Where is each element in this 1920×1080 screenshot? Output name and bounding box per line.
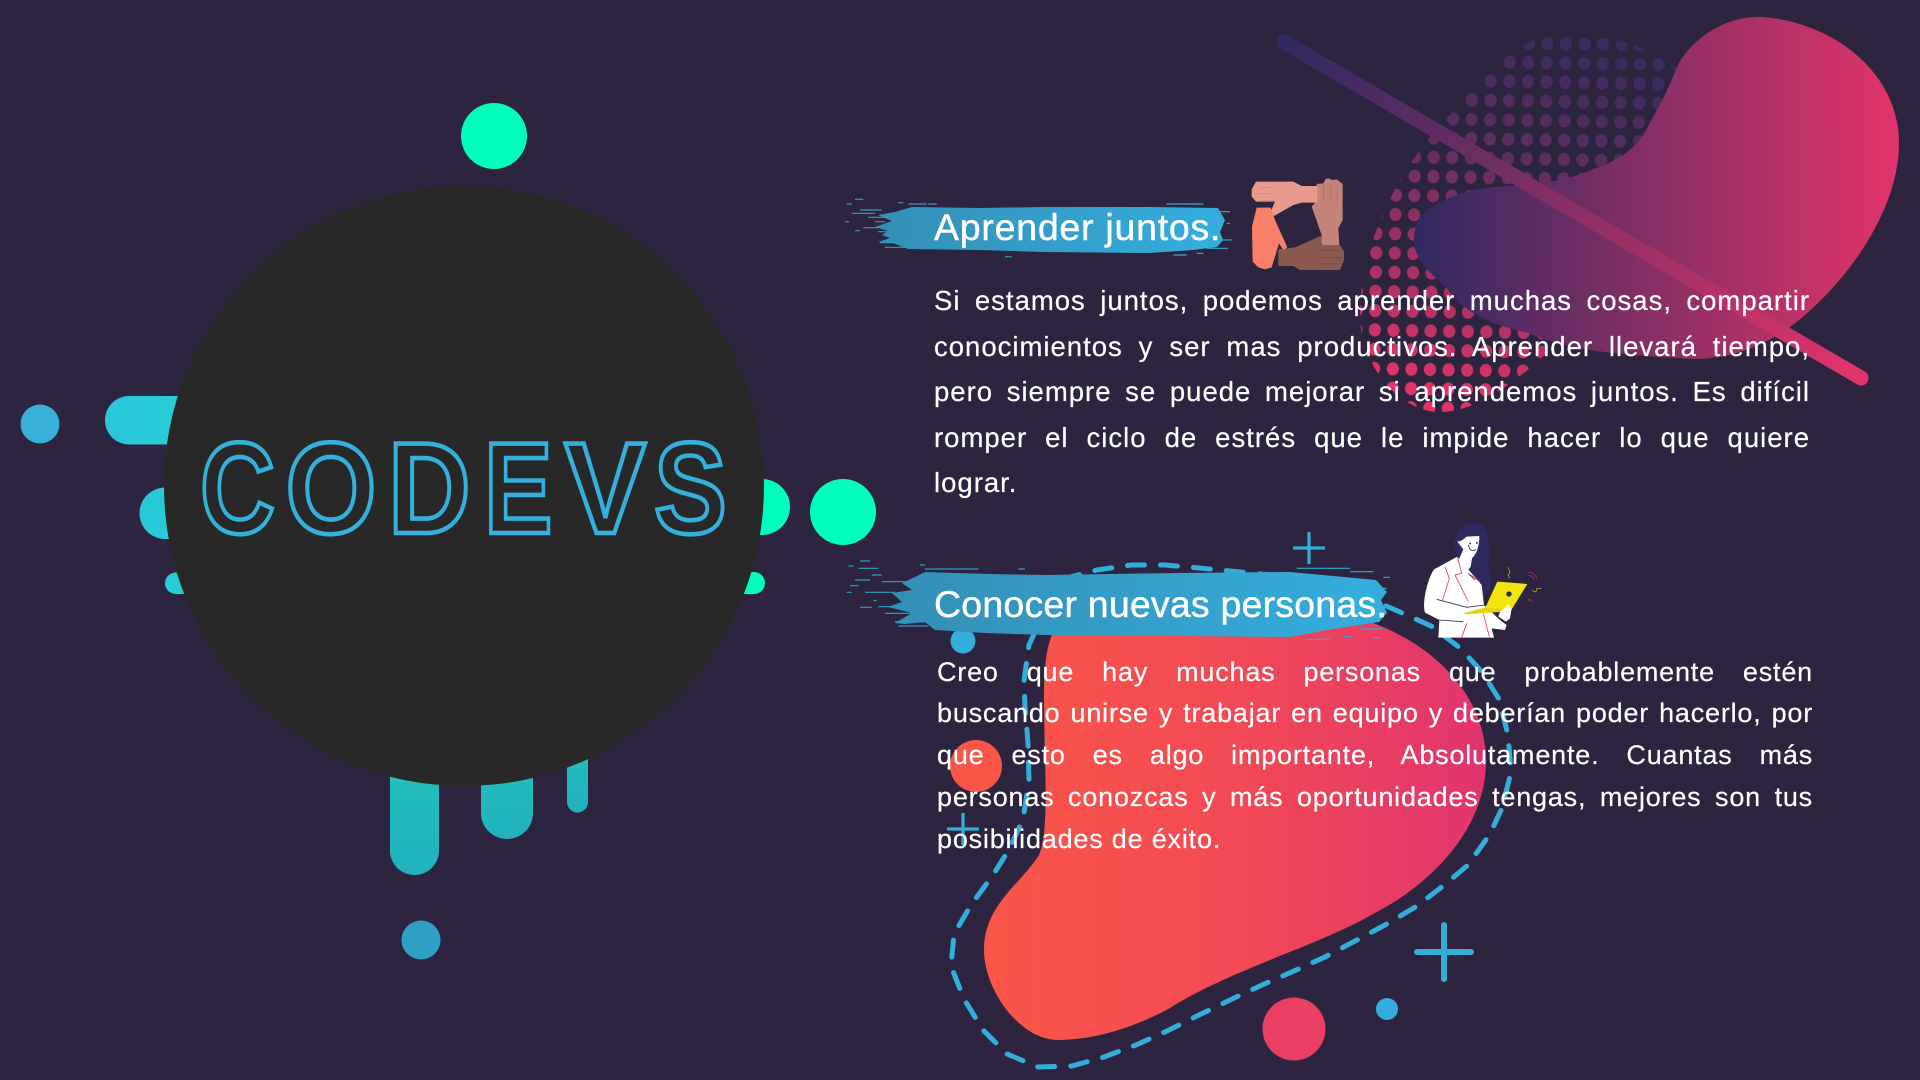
paragraph: Conocer nuevas personas: buscando unirse y trabajar en equipo y deberían poder hacerlo, por: [937, 698, 1813, 728]
dot: coral: [950, 740, 1002, 792]
brush banner: Conocer nuevas personas: [847, 561, 1390, 639]
heading: Aprender juntos: Aprender juntos.: [934, 206, 1221, 248]
icon: four hands in a square: [1252, 179, 1344, 270]
paragraph: Conocer nuevas personas: posibilidades de éxito.: [937, 824, 1221, 854]
bottom bars: turquoise drips: [390, 700, 588, 875]
right pills: mint streaks behind circle: [700, 479, 790, 594]
plus: top: [1293, 532, 1325, 564]
logo: CODEVS: [200, 415, 727, 561]
logo: CODEVS: C: [200, 415, 275, 561]
paragraph: Conocer nuevas personas: [937, 656, 1813, 854]
dot: right mint: [810, 479, 876, 545]
left pills: turquoise streaks behind circle: [105, 396, 280, 594]
dot: left blue: [20, 404, 60, 444]
paragraph: Aprender juntos: conocimientos y ser mas productivos. Aprender llevará tiempo,: [934, 330, 1810, 362]
paragraph: Aprender juntos: romper el ciclo de estrés que le impide hacer lo que quiere: [934, 422, 1810, 452]
brush banner: Aprender juntos: [845, 199, 1232, 257]
plus: large: [1417, 925, 1471, 979]
paragraph: Aprender juntos: pero siempre se puede mejorar si aprendemos juntos. Es difícil: [934, 376, 1810, 407]
paragraph: Aprender juntos: [934, 285, 1810, 498]
logo: CODEVS: E: [484, 415, 552, 561]
paragraph: Conocer nuevas personas: personas conozcas y más oportunidades tengas, mejores son tus: [937, 782, 1813, 812]
dot: bottom blue: [402, 920, 440, 960]
dot: small blue behind banner: [950, 628, 976, 654]
plus: left: [947, 813, 979, 845]
logo: CODEVS: O: [286, 416, 376, 561]
dot: small blue: [1376, 998, 1398, 1020]
logo: CODEVS: D: [388, 415, 471, 561]
halftone dot pattern: [1360, 36, 1676, 412]
dark logo circle: [164, 186, 764, 786]
paragraph: Aprender juntos: lograr.: [934, 467, 1017, 498]
dot: red: [1262, 998, 1326, 1060]
diagonal gradient line: [1284, 42, 1861, 378]
logo: CODEVS: S: [654, 416, 727, 561]
bottom right gradient blob: [984, 596, 1486, 1040]
top right gradient blob: [1414, 17, 1899, 359]
paragraph: Aprender juntos: Si estamos juntos, podemos aprender muchas cosas, compartir: [934, 285, 1810, 316]
paragraph: Conocer nuevas personas: Creo que hay muchas personas que probablemente estén: [937, 656, 1813, 686]
heading: Conocer nuevas personas: Conocer nuevas personas.: [934, 583, 1387, 625]
dot: top mint: [461, 103, 527, 169]
dashed outline around blob: [951, 565, 1511, 1067]
logo: CODEVS: V: [564, 416, 646, 561]
paragraph: Conocer nuevas personas: que esto es algo importante, Absolutamente. Cuantas más: [937, 740, 1813, 770]
icon: woman with yellow tablet: [1424, 523, 1542, 638]
